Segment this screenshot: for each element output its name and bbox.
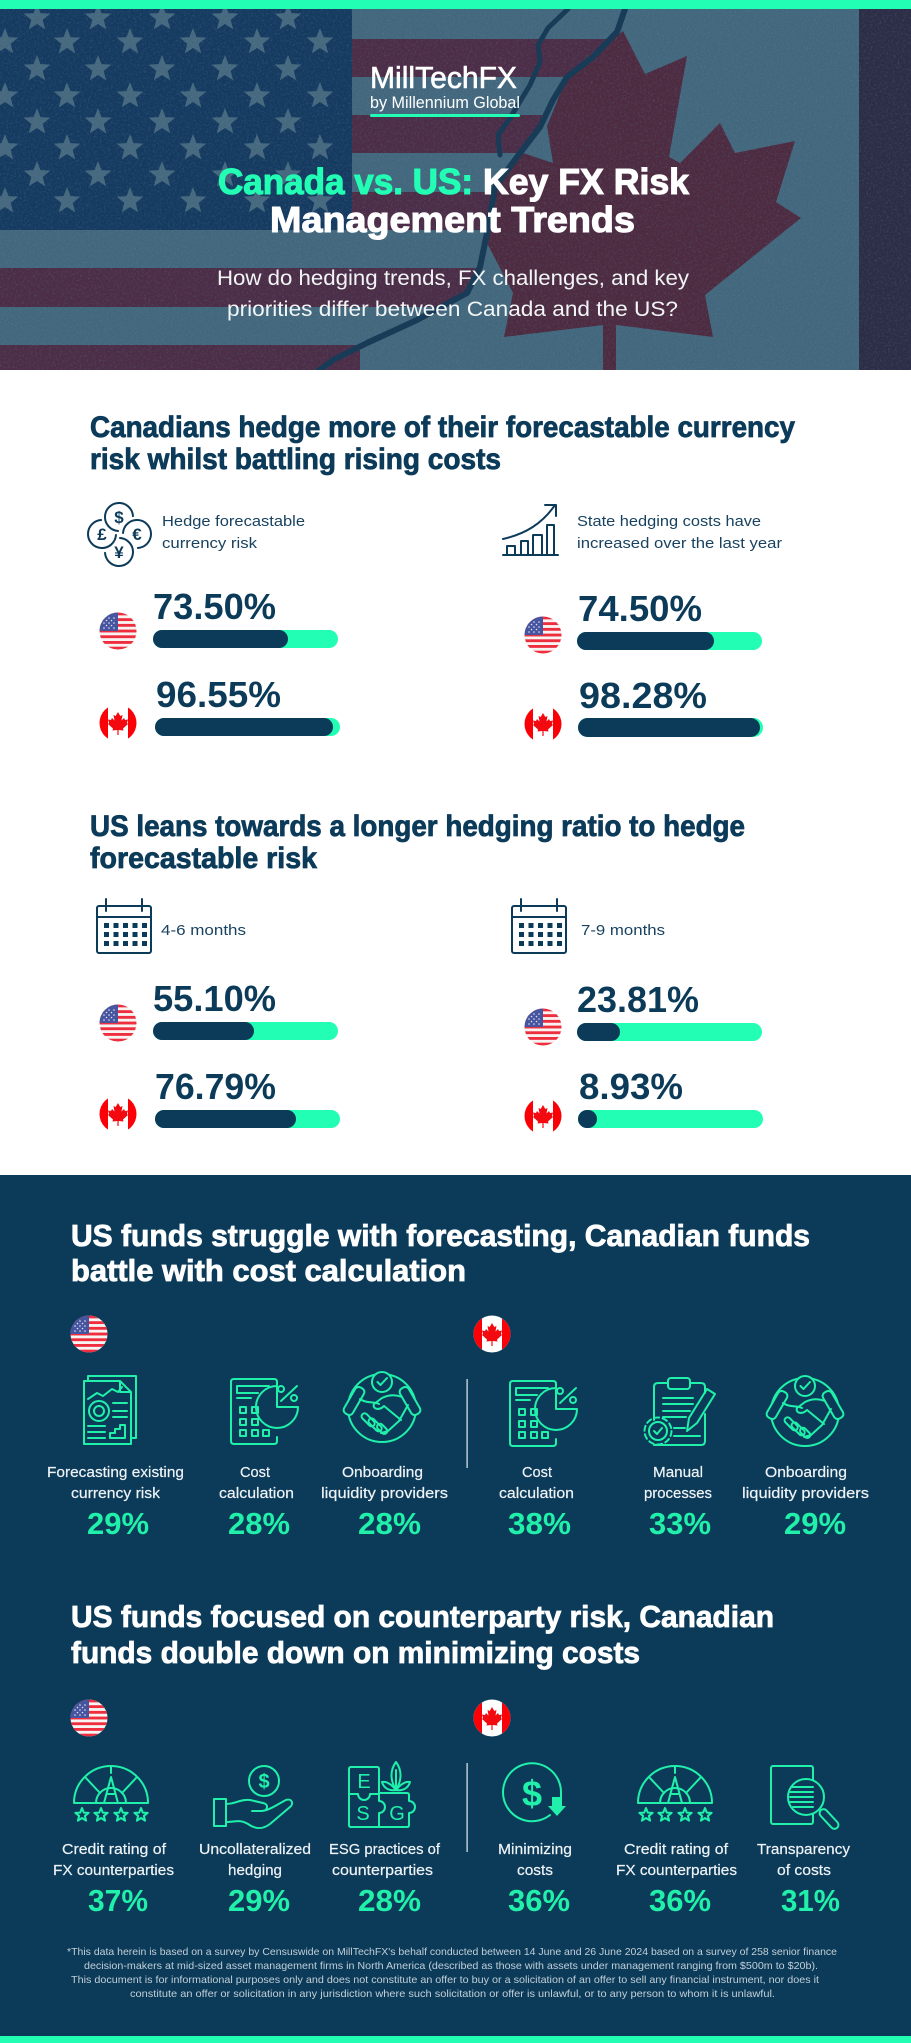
divider: [466, 1763, 468, 1852]
text: hedging costs increased: State hedging costs have: [577, 513, 761, 530]
icon: calendar 4-6 months: [97, 899, 151, 953]
icon: currency exchange: [87, 502, 152, 567]
bar: Canada hedging costs 98.28%: 98.28%: [579, 675, 707, 716]
stat: uncollateralized hedging 29%: hedging: [228, 1862, 282, 1879]
heading: US leans towards longer hedging: [90, 810, 745, 875]
bar: US hedge forecastable 73.50%: 73.50%: [153, 586, 276, 627]
stat: minimizing costs 36%: [498, 1763, 572, 1918]
bar: US hedge forecastable 73.50%: [99, 586, 338, 650]
text: hedge forecastable currency risk: currency risk: [162, 535, 258, 552]
stat: onboarding liquidity providers 28%: [321, 1372, 448, 1541]
footnote: decision-makers at mid-sized asset management firms in North America (described as those with assets under management ranging from $500m to $20b).: [84, 1960, 818, 1972]
text: hedging costs increased: [577, 513, 782, 552]
icon: currency exchange: $: [114, 508, 124, 527]
stat: transparency of costs 31%: of costs: [777, 1862, 831, 1879]
subtitle: priorities differ between Canada and the US?: [227, 298, 678, 321]
stat: Canada cost calculation 38%: [499, 1381, 577, 1541]
stat: forecasting existing currency risk 29%: Forecasting existing: [47, 1464, 184, 1481]
bar: Canada 4-6 months 76.79%: [99, 1066, 340, 1133]
heading: US funds focused on counterparty risk: funds double down on minimizing costs: [71, 1635, 640, 1670]
US flag stripes: [0, 39, 652, 370]
icon: currency exchange: €: [132, 525, 142, 544]
stat: Canada credit rating of FX counterparties 36%: [616, 1766, 737, 1918]
icon: rising chart: [503, 505, 558, 555]
stat: uncollateralized hedging 29%: 29%: [228, 1883, 290, 1918]
stat: credit rating of FX counterparties 37%: 37%: [88, 1883, 148, 1918]
stat: ESG practices of counterparties 28%: ESG practices of: [329, 1841, 441, 1858]
title: Canada vs. US:: [218, 161, 473, 202]
heading: US funds struggle with forecasting: [71, 1218, 810, 1288]
stat: cost calculation 28%: Cost: [240, 1464, 271, 1481]
stat: minimizing costs 36%: 36%: [508, 1883, 570, 1918]
flag: Canada challenges: [473, 1315, 511, 1353]
heading: Canadians hedge more: [90, 411, 796, 476]
footnote: This document is for informational purposes only and does not constitute an offer to buy or a solicitation of an offer to sell any financial instrument, nor does it: [71, 1974, 819, 1986]
stat: ESG practices of counterparties 28%: G: [389, 1803, 405, 1825]
stat: Canada manual processes 33%: 33%: [649, 1506, 711, 1541]
bar: US 4-6 months 55.10%: 55.10%: [153, 978, 276, 1019]
bar: Canada 4-6 months 76.79%: 76.79%: [155, 1066, 276, 1107]
stat: uncollateralized hedging 29%: $: [258, 1771, 270, 1793]
stat: transparency of costs 31%: [757, 1766, 851, 1918]
stat: minimizing costs 36%: costs: [517, 1862, 553, 1879]
stat: Canada credit rating of FX counterparties 36%: Credit rating of: [624, 1841, 729, 1858]
logo: MillTechFX: by Millennium Global: [370, 93, 520, 112]
bar: US hedging costs 74.50%: [524, 588, 762, 654]
text: 7-9 months: 7-9 months: [581, 922, 665, 939]
icon: currency exchange: ¥: [114, 543, 124, 562]
heading: US leans towards longer hedging: forecastable risk: [90, 842, 318, 875]
stat: forecasting existing currency risk 29%: currency risk: [71, 1485, 161, 1502]
stat: cost calculation 28%: [219, 1379, 298, 1541]
stat: minimizing costs 36%: Minimizing: [498, 1841, 572, 1858]
footnote: constitute an offer or solicitation in any jurisdiction where such solicitation or offer is unlawful, or to any person to whom it is unlawful.: [130, 1988, 775, 2000]
flag: US challenges: [70, 1315, 108, 1353]
stat: Canada onboarding liquidity providers 29%: Onboarding: [765, 1464, 847, 1481]
bar: Canada hedge forecastable 96.55%: 96.55%: [156, 674, 281, 715]
title: Management Trends: [270, 199, 635, 240]
stat: Canada cost calculation 38%: 38%: [508, 1506, 571, 1541]
title: [218, 161, 690, 240]
text: 4-6 months: 4-6 months: [161, 922, 246, 939]
stat: Canada onboarding liquidity providers 29%: 29%: [784, 1506, 846, 1541]
text: hedging costs increased: increased over the last year: [577, 535, 782, 552]
bar: Canada 7-9 months 8.93%: [524, 1066, 763, 1135]
icon: currency exchange: £: [97, 525, 107, 544]
icon: calendar 7-9 months: [512, 899, 566, 953]
panel: challenges and priorities (navy section): [0, 1175, 911, 2036]
panel: hedging trends (white section): [0, 370, 911, 1175]
stat: cost calculation 28%: calculation: [219, 1485, 294, 1502]
divider: [466, 1379, 468, 1468]
stat: onboarding liquidity providers 28%: 28%: [358, 1506, 421, 1541]
bar: US 7-9 months 23.81%: [524, 979, 762, 1046]
concrete texture: [0, 9, 911, 370]
subtitle: How do hedging trends, FX challenges, and key: [217, 267, 690, 290]
crack between flags: [317, 9, 625, 372]
heading: US funds focused on counterparty risk: US funds focused on counterparty risk, Canadian: [71, 1599, 774, 1634]
Canadian flag right band: [859, 9, 911, 370]
stat: ESG practices of counterparties 28%: counterparties: [332, 1862, 433, 1879]
stat: Canada manual processes 33%: [644, 1378, 715, 1541]
stat: onboarding liquidity providers 28%: liquidity providers: [321, 1485, 448, 1502]
stat: uncollateralized hedging 29%: [199, 1766, 311, 1918]
heading: Canadians hedge more: Canadians hedge more of their forecastable currency: [90, 411, 796, 444]
stat: forecasting existing currency risk 29%: 29%: [87, 1506, 149, 1541]
stat: credit rating of FX counterparties 37%: Credit rating of: [62, 1841, 167, 1858]
bar: Canada hedge forecastable 96.55%: [99, 674, 340, 742]
bar: US hedging costs 74.50%: 74.50%: [578, 588, 702, 629]
stat: onboarding liquidity providers 28%: Onboarding: [342, 1464, 423, 1481]
heading: US leans towards longer hedging: US leans towards a longer hedging ratio to hedge: [90, 810, 745, 843]
bottom accent strip: [0, 2036, 911, 2043]
stat: Canada manual processes 33%: Manual: [653, 1464, 703, 1481]
stat: Canada manual processes 33%: processes: [644, 1485, 712, 1502]
stat: credit rating of FX counterparties 37%: [53, 1766, 174, 1918]
stat: transparency of costs 31%: 31%: [781, 1883, 840, 1918]
stat: Canada cost calculation 38%: calculation: [499, 1485, 574, 1502]
flag: US priorities: [70, 1699, 108, 1737]
heading: US funds struggle with forecasting: US funds struggle with forecasting, Canadian funds: [71, 1218, 810, 1253]
Canadian maple leaf: [487, 31, 801, 370]
US flag canton with stars: [0, 4, 352, 230]
bar: US 4-6 months 55.10%: [99, 978, 338, 1042]
heading: US funds struggle with forecasting: battle with cost calculation: [71, 1253, 466, 1288]
hero banner: cracked US and Canadian flags: [0, 4, 911, 372]
bar: Canada hedging costs 98.28%: [524, 675, 763, 743]
flag: Canada priorities: [473, 1699, 511, 1737]
bar: Canada 7-9 months 8.93%: 8.93%: [579, 1066, 683, 1107]
stat: cost calculation 28%: 28%: [228, 1506, 290, 1541]
stat: forecasting existing currency risk 29%: [47, 1376, 184, 1541]
bar: US 7-9 months 23.81%: 23.81%: [577, 979, 699, 1020]
stat: ESG practices of counterparties 28%: E: [357, 1771, 371, 1793]
stat: Canada onboarding liquidity providers 29%: [742, 1376, 869, 1541]
heading: Canadians hedge more: risk whilst battling rising costs: [90, 443, 501, 476]
footnote: [67, 1946, 837, 2000]
stat: credit rating of FX counterparties 37%: FX counterparties: [53, 1862, 174, 1879]
heading: US funds focused on counterparty risk: [71, 1599, 774, 1670]
stat: ESG practices of counterparties 28%: [329, 1762, 441, 1918]
stat: uncollateralized hedging 29%: Uncollateralized: [199, 1841, 311, 1858]
stat: Canada cost calculation 38%: Cost: [522, 1464, 553, 1481]
stat: minimizing costs 36%: $: [522, 1773, 542, 1814]
footnote: *This data herein is based on a survey by Censuswide on MillTechFX's behalf conducted between 14 June and 26 June 2024 based on a survey of 258 senior finance: [67, 1946, 837, 1958]
stat: ESG practices of counterparties 28%: 28%: [358, 1883, 421, 1918]
stat: Canada credit rating of FX counterparties 36%: 36%: [649, 1883, 711, 1918]
title: Key FX Risk: [483, 161, 690, 202]
subtitle: [217, 267, 690, 321]
top accent strip: [0, 0, 911, 9]
text: hedge forecastable currency risk: Hedge forecastable: [162, 513, 305, 530]
stat: Canada onboarding liquidity providers 29%: liquidity providers: [742, 1485, 869, 1502]
logo: MillTechFX: MillTechFX: [370, 60, 517, 95]
text: hedge forecastable currency risk: [162, 513, 305, 552]
stat: ESG practices of counterparties 28%: S: [356, 1803, 370, 1825]
logo: MillTechFX: [370, 60, 520, 117]
stat: transparency of costs 31%: Transparency: [757, 1841, 851, 1858]
stat: Canada credit rating of FX counterparties 36%: FX counterparties: [616, 1862, 737, 1879]
